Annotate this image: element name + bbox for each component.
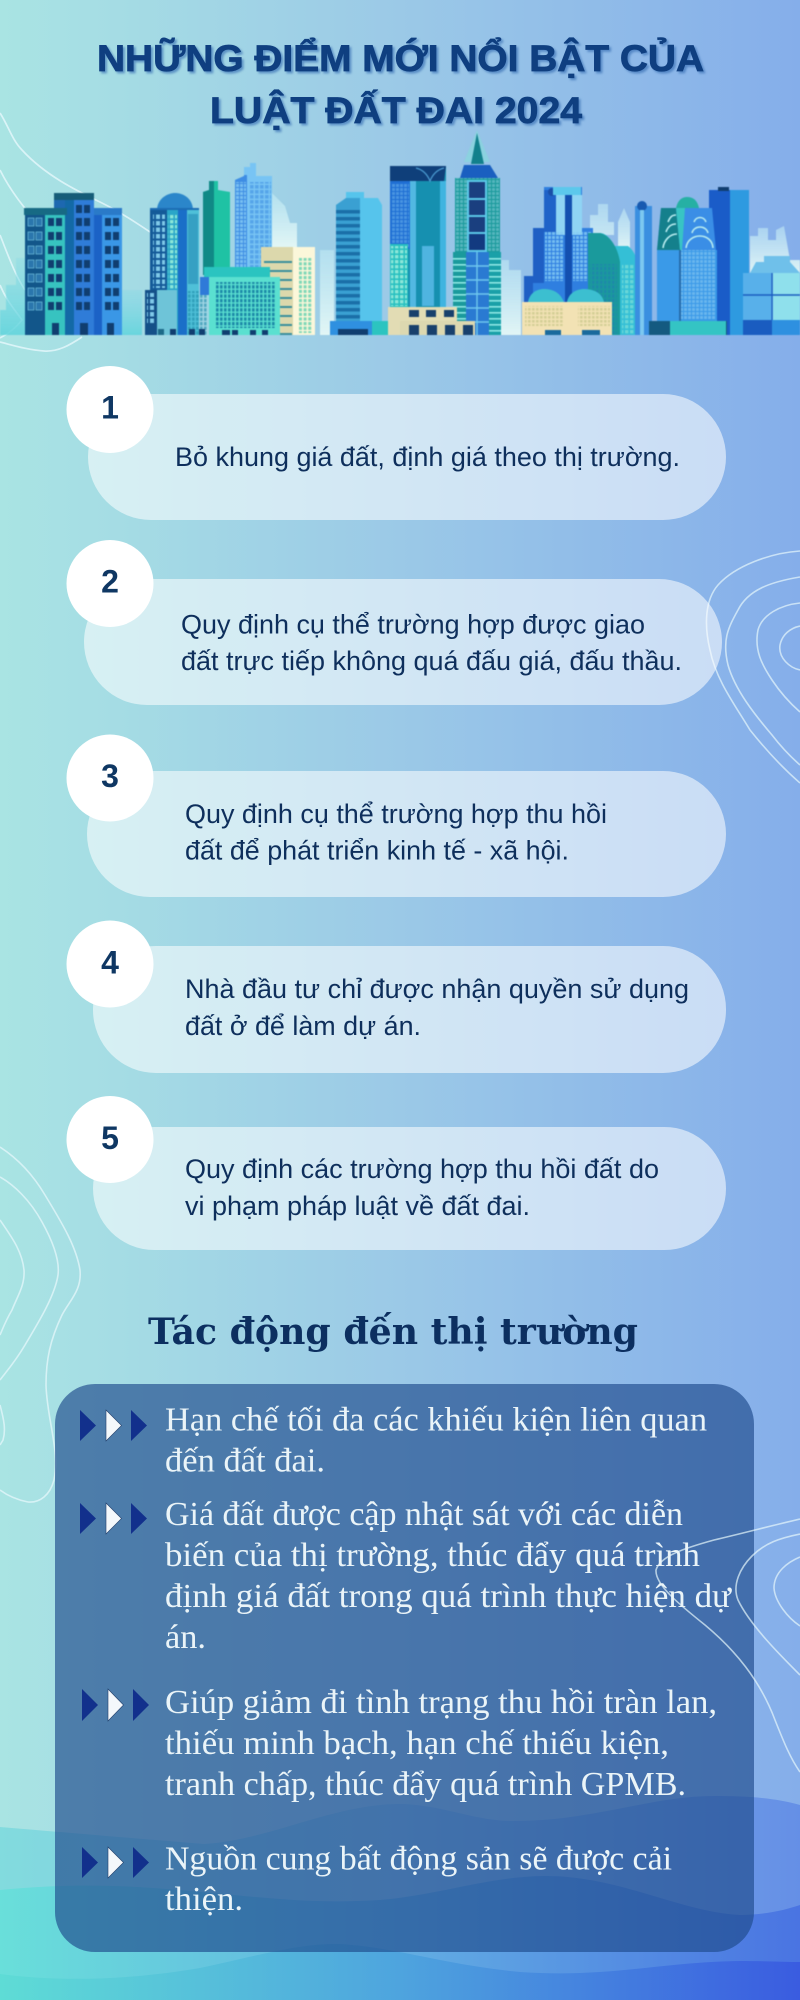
list card 2: [66, 540, 722, 705]
heading: market impact: Tác động đến thị trường: [148, 1311, 638, 1353]
text 5: vi phạm pháp luật về đất đai.: [185, 1191, 530, 1221]
building 14: [635, 201, 652, 335]
list card 5: [66, 1096, 726, 1250]
contour lines: right: [706, 551, 800, 783]
impact item 2: biến của thị trường, thúc đẩy quá trình: [165, 1537, 700, 1574]
text 3: đất để phát triển kinh tế - xã hội.: [185, 836, 569, 866]
impact item 4: thiện.: [165, 1881, 243, 1918]
badge 3: 3: [101, 758, 119, 794]
building 17: [743, 256, 800, 335]
background waves: [0, 1796, 800, 2000]
badge 1: 1: [101, 390, 119, 426]
building 3: [203, 181, 230, 275]
badge 2: [66, 540, 154, 627]
building 9 spire tower: [453, 130, 501, 335]
title: NHỮNG ĐIỂM MỚI NỔI BẬT CỦA: [97, 36, 704, 79]
contour lines: lower left: [0, 1147, 80, 1502]
text 2: đất trực tiếp không quá đấu giá, đấu thầu.: [181, 646, 682, 676]
text 4: Nhà đầu tư chỉ được nhận quyền sử dụng: [185, 974, 689, 1004]
building 2: [145, 193, 207, 335]
badge 3: [66, 734, 154, 822]
text 5: Quy định các trường hợp thu hồi đất do: [185, 1154, 659, 1184]
badge 5: 5: [101, 1120, 119, 1156]
text 1: Bỏ khung giá đất, định giá theo thị trường.: [175, 442, 680, 472]
title: [97, 36, 704, 131]
list card 4: [66, 920, 726, 1073]
building 7: [330, 192, 388, 335]
text 3: [185, 799, 607, 866]
building 4: [235, 163, 272, 275]
impact item 4: [82, 1840, 672, 1918]
impact item 3: tranh chấp, thúc đẩy quá trình GPMB.: [165, 1766, 686, 1803]
building 15 arches: [649, 197, 727, 335]
impact item 2: định giá đất trong quá trình thực hiện dự: [165, 1578, 733, 1615]
impact item 3: thiếu minh bạch, hạn chế thiếu kiện,: [165, 1725, 669, 1762]
building 11: [524, 187, 593, 306]
impact item 2: Giá đất được cập nhật sát với các diễn: [165, 1496, 683, 1533]
building 5: [261, 247, 315, 335]
icon: triple arrows 4: [82, 1847, 149, 1878]
badge 1: [66, 366, 154, 453]
text 4: đất ở để làm dự án.: [185, 1011, 421, 1041]
impact item 4: Nguồn cung bất động sản sẽ được cải: [165, 1840, 672, 1878]
building 10 cream base: [388, 307, 475, 335]
list card 1: [66, 366, 726, 520]
icon: triple arrows 1: [80, 1410, 147, 1441]
icon: triple arrows 2: [80, 1503, 147, 1534]
impact item 1: đến đất đai.: [165, 1442, 325, 1480]
contour lines: top left: [0, 113, 150, 351]
list card 3: [66, 734, 726, 897]
building 13 cream: [522, 289, 612, 335]
title: LUẬT ĐẤT ĐAI 2024: [210, 89, 582, 131]
text 3: Quy định cụ thể trường hợp thu hồi: [185, 799, 607, 829]
icon: triple arrows 3: [82, 1689, 149, 1721]
impact item 3: Giúp giảm đi tình trạng thu hồi tràn lan,: [165, 1684, 717, 1721]
impact item 1: Hạn chế tối đa các khiếu kiện liên quan: [165, 1402, 707, 1438]
text 2: Quy định cụ thể trường hợp được giao: [181, 610, 645, 640]
impact item 2: [80, 1496, 733, 1656]
panel: market impact: [55, 1384, 800, 1952]
text 4: [185, 974, 689, 1041]
pale background towers: [0, 193, 800, 335]
city skyline illustration: [0, 130, 800, 335]
badge 5: [66, 1096, 154, 1183]
impact item 1: [80, 1402, 707, 1480]
badge 4: 4: [101, 944, 119, 980]
building 16: [709, 187, 749, 335]
building 1: [24, 193, 122, 335]
text 5: [185, 1154, 659, 1221]
badge 4: [66, 920, 154, 1008]
badge 2: 2: [101, 564, 119, 600]
impact item 3: [82, 1684, 717, 1803]
building 6: [200, 267, 280, 335]
text 2: [181, 610, 682, 676]
impact item 2: án.: [165, 1619, 206, 1656]
building 12: [588, 233, 638, 335]
contour lines: lower right: [656, 1519, 800, 1772]
building 8: [390, 166, 446, 310]
